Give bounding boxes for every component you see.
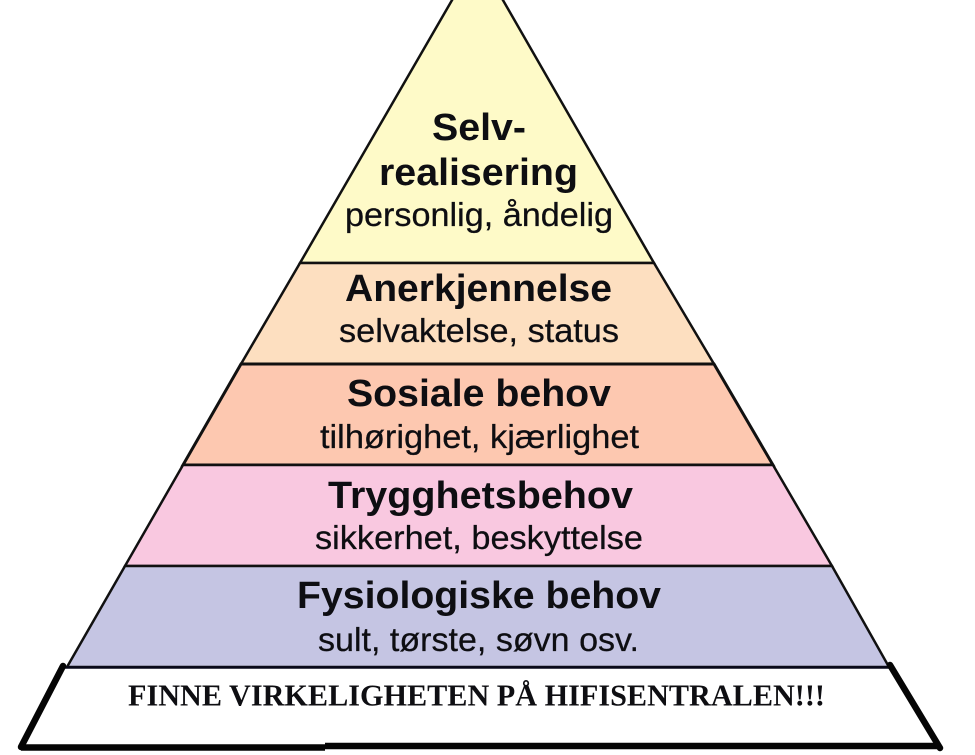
tier: trygghetsbehov: Trygghetsbehov — [328, 475, 633, 517]
tier: selvrealisering: personlig, åndelig — [345, 196, 613, 233]
tier: sosiale behov: tilhørighet, kjærlighet — [320, 418, 639, 455]
tier: selvrealisering — [300, 0, 654, 263]
tier: trygghetsbehov: sikkerhet, beskyttelse — [315, 519, 643, 556]
tier: anerkjennelse: selvaktelse, status — [339, 312, 619, 349]
tier: sosiale behov: Sosiale behov — [347, 373, 611, 415]
tier: fysiologiske behov — [67, 566, 889, 667]
base tier: added message — [21, 665, 940, 748]
base tier: added message: FINNE VIRKELIGHETEN PÅ HIFISENTRALEN!!! — [128, 678, 825, 712]
tier: anerkjennelse — [241, 263, 714, 364]
tier: fysiologiske behov: Fysiologiske behov — [297, 575, 661, 617]
tier: selvrealisering: Selv- — [432, 107, 526, 149]
tier: sosiale behov — [183, 364, 773, 465]
tier: fysiologiske behov: sult, tørste, søvn osv. — [318, 621, 639, 658]
tier: trygghetsbehov — [125, 465, 832, 566]
tier: anerkjennelse: Anerkjennelse — [345, 268, 612, 310]
tier: selvrealisering: realisering — [379, 152, 578, 194]
